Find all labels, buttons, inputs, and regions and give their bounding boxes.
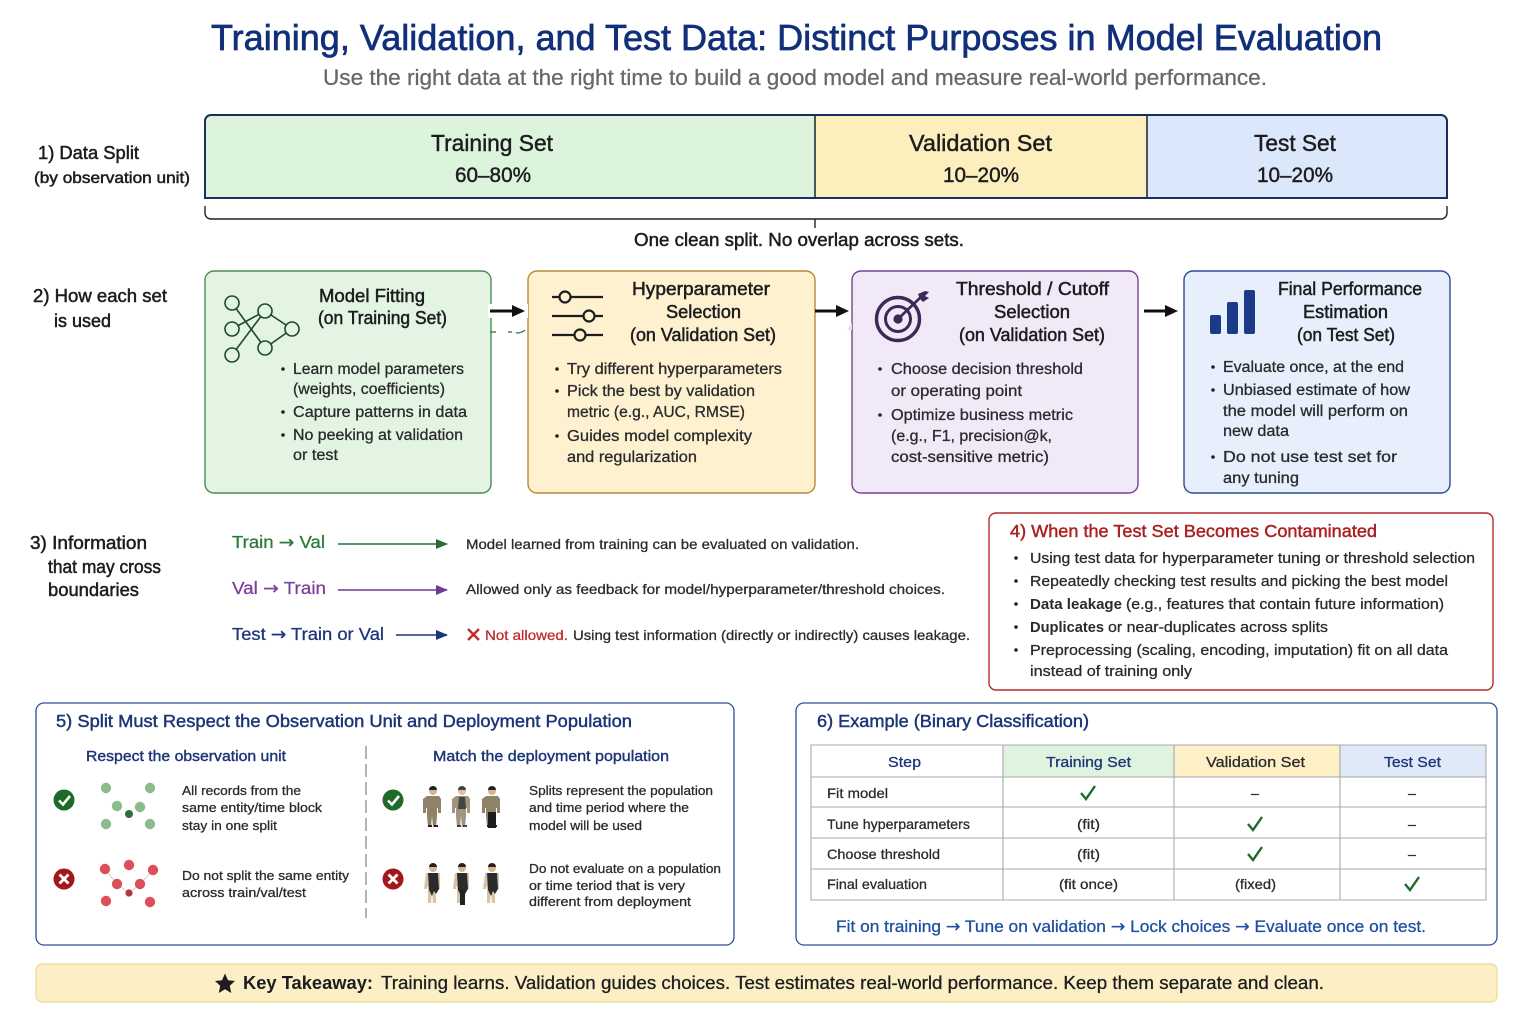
row: final evaluation [827,876,1419,892]
bullet list: Learn model parameters [293,361,464,378]
bullet list [1014,550,1475,680]
bullet list: or test [293,447,339,464]
key takeaway banner [36,964,1497,1002]
flow: test to train or val: Test → Train or Val [232,624,384,645]
table header: Test Set [1384,754,1442,771]
text: do not split [182,868,350,900]
bullet list: new data [1223,423,1289,440]
section 2 label: 2) How each set [33,286,167,306]
panel: hyperparameter selection [528,271,815,493]
heading: Estimation [1303,302,1388,322]
bullet list: any tuning [1223,470,1299,487]
training set segment: 60–80% [455,164,531,187]
table header: Validation Set [1206,754,1306,771]
bullet list: Data leakage [1030,596,1122,613]
heading: Selection [666,302,741,322]
icon: target [876,291,929,340]
section 3 label: that may cross [48,557,161,577]
icon: check [382,790,404,810]
icon: star [215,974,235,993]
bullet list [281,361,467,464]
heading: (on Test Set) [1297,325,1395,345]
panel: final performance [1184,271,1450,493]
heading: Hyperparameter [632,279,770,299]
bullet list [1211,359,1411,487]
bullet list: Repeatedly checking test results and picking the best model [1030,573,1448,590]
icon: check [54,790,74,810]
panel: binary classification example [796,703,1497,945]
heading: 5) Split Must Respect the Observation Unit and Deployment Population [56,711,632,731]
row: choose threshold: (fit) [1077,846,1100,862]
validation set segment [909,130,1053,187]
text: do not evaluate [529,861,721,909]
bullet list: Using test data for hyperparameter tuning or threshold selection [1030,550,1475,567]
bullet list: Optimize business metric [891,407,1073,424]
icon: cross [382,868,404,890]
text: splits represent [529,783,713,833]
heading [630,279,776,345]
bullet list: cost-sensitive metric) [891,449,1049,466]
bullet list: Evaluate once, at the end [1223,359,1404,376]
icon: sliders [552,292,603,340]
text: same entity: stay in one split [182,818,277,833]
test set segment: 10–20% [1257,164,1333,187]
section 3 label: 3) Information [30,533,147,553]
bullet list [555,361,782,466]
flow: test to train or val: Using test information (directly or indirectly) causes leakage. [573,627,970,643]
heading [318,286,447,328]
heading: (on Training Set) [318,308,447,328]
table caption: Fit on training → Tune on validation → Lock choices → Evaluate once on test. [836,917,1426,937]
flow: test to train or val: Not allowed. [485,627,568,643]
example table [811,745,1486,900]
training set segment: Training Set [431,130,554,156]
row: final evaluation: (fit once) [1059,876,1118,892]
arrow: hyperparameters to threshold [815,305,852,330]
section 2 label [33,286,167,331]
row: fit model: – [1408,785,1416,801]
validation set segment: Validation Set [909,130,1053,156]
row: fit model [827,785,1416,801]
subheading: respect the observation unit: Respect the observation unit [86,748,287,765]
heading: Selection [994,302,1070,322]
heading: Threshold / Cutoff [956,279,1110,299]
row: tune hyperparameters: Tune hyperparameters [827,816,970,832]
takeaway text: Key Takeaway: [243,973,373,993]
icon: bar chart [1210,290,1255,334]
training set segment [431,130,554,187]
text: same entity: same entity/time block [182,800,323,815]
flow: val to train: Val → Train [232,578,326,599]
heading: 6) Example (Binary Classification) [817,711,1089,731]
text: splits represent: Splits represent the population [529,783,713,798]
title: Training, Validation, and Test Data: Distinct Purposes in Model Evaluation [211,17,1382,58]
icon: representative people [423,786,500,828]
row: choose threshold [827,846,1416,862]
icon: cross [54,868,74,890]
bullet list: No peeking at validation [293,427,463,444]
arrow: threshold to final [1144,305,1178,317]
row: tune hyperparameters [827,816,1416,832]
section 3 label: boundaries [48,580,139,600]
table header: Step [888,754,921,771]
bullet list: or operating point [891,383,1023,400]
flow: val to train [232,578,945,599]
panel: model fitting [205,271,491,493]
heading: Final Performance [1278,279,1422,299]
bracket caption: One clean split. No overlap across sets. [634,230,964,250]
validation set segment: 10–20% [943,164,1019,187]
bullet list: metric (e.g., AUC, RMSE) [567,404,745,421]
bracket [205,206,1447,228]
heading: 4) When the Test Set Becomes Contaminated [1010,521,1377,541]
test set segment [1254,130,1337,187]
subheading: match the deployment population: Match the deployment population [433,748,669,765]
section 1 label: data split: 1) Data Split [38,143,139,163]
arrow: fitting to hyperparameters [488,304,528,333]
text: do not split: across train/val/test [182,885,306,900]
test set segment: Test Set [1254,130,1337,156]
bullet list: Guides model complexity [567,428,752,445]
text: splits represent: model will be used [529,818,642,833]
row: choose threshold: – [1408,846,1416,862]
section 2 label: is used [54,311,111,331]
takeaway text: Training learns. Validation guides choices. Test estimates real-world performance. Keep them separate and clean. [381,973,1324,993]
icon: scattered red dots [100,860,158,907]
icon: different people [424,863,499,905]
flow: train to val: Model learned from training can be evaluated on validation. [466,536,859,552]
bullet list: Unbiased estimate of how [1223,382,1411,399]
bullet list: Do not use test set for [1223,449,1397,466]
row: choose threshold: Choose threshold [827,846,940,862]
row: tune hyperparameters: (fit) [1077,816,1100,832]
bullet list: instead of training only [1030,663,1193,680]
row: final evaluation: (fixed) [1235,876,1276,892]
panel: threshold selection [852,271,1138,493]
table header: Training Set [1046,754,1132,771]
bullet list: (e.g., features that contain future information) [1126,596,1444,613]
bullet list: and regularization [567,449,697,466]
text: splits represent: and time period where the [529,800,689,815]
flow: train to val [232,532,859,553]
bullet list: Capture patterns in data [293,404,467,421]
subtitle: Use the right data at the right time to build a good model and measure real-world performance. [323,65,1267,90]
icon: neural network [225,296,299,362]
text: do not split: Do not split the same entity [182,868,350,883]
heading: (on Validation Set) [959,325,1105,345]
row: tune hyperparameters: – [1408,816,1416,832]
bullet list: Duplicates [1030,619,1104,636]
flow: test to train or val [232,624,970,645]
text: do not evaluate: or time teriod that is very [529,878,686,893]
heading [956,279,1110,345]
section 3 label [30,533,161,600]
panel: observation unit and deployment population [36,703,734,945]
bullet list: the model will perform on [1223,403,1408,420]
heading: Model Fitting [319,286,425,306]
bullet list [878,361,1083,466]
section 1 label: data split [34,143,190,187]
bullet list: (e.g., F1, precision@k, [891,428,1052,445]
bullet list: Try different hyperparameters [567,361,782,378]
row: fit model: Fit model [827,785,888,801]
text: same entity [182,783,323,833]
bullet list: Preprocessing (scaling, encoding, imputation) fit on all data [1030,642,1449,659]
bullet list: or near-duplicates across splits [1108,619,1328,636]
text: do not evaluate: Do not evaluate on a population [529,861,721,876]
data split bar [205,115,1447,198]
flow: train to val: Train → Val [232,532,325,553]
table header [888,754,1442,771]
bullet list: Pick the best by validation [567,383,755,400]
bullet list: (weights, coefficients) [293,381,445,398]
section 1 label: data split: (by observation unit) [34,170,190,187]
row: final evaluation: Final evaluation [827,876,927,892]
bullet list: Choose decision threshold [891,361,1083,378]
text: same entity: All records from the [182,783,301,798]
heading [1278,279,1422,345]
flow: val to train: Allowed only as feedback for model/hyperparameter/threshold choices. [466,581,945,597]
panel: contaminated test set [989,513,1493,690]
text: do not evaluate: different from deployment [529,894,691,909]
row: fit model: – [1251,785,1259,801]
heading: (on Validation Set) [630,325,776,345]
icon: grouped green dots [101,783,155,829]
